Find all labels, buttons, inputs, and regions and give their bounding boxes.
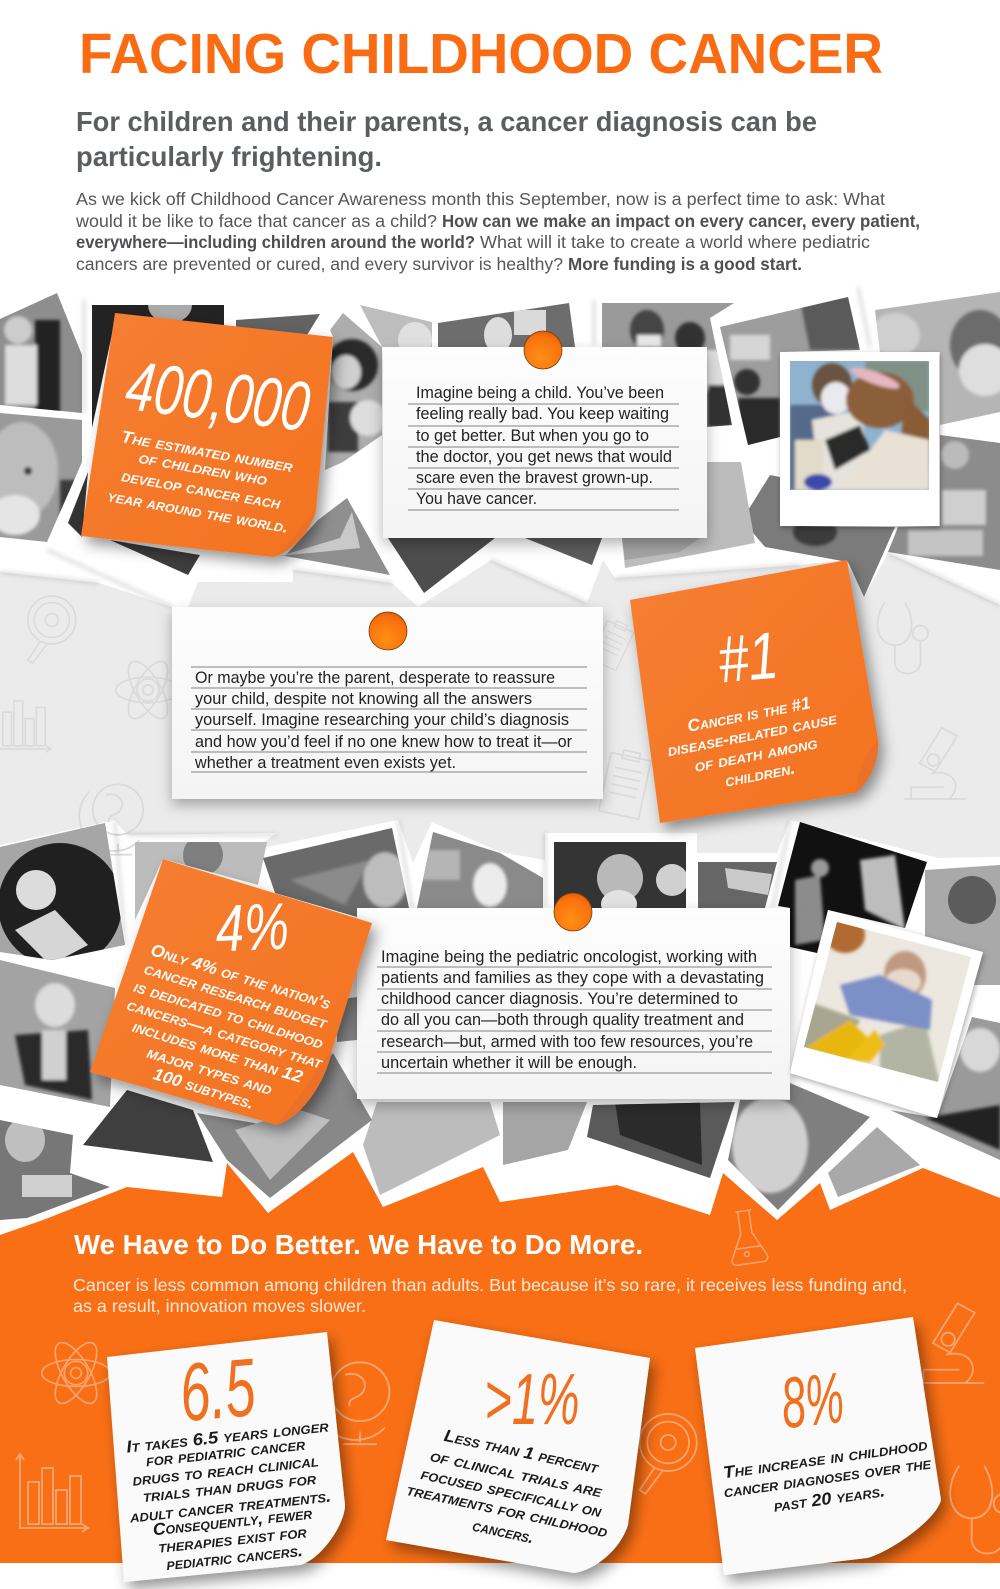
heading: we have to do better: We Have to Do Better. We Have to Do More. [74, 1229, 643, 1260]
photo: child with toys [363, 1102, 587, 1195]
photo: child in mask with poster [438, 303, 575, 347]
icon: pin [369, 612, 407, 650]
photo: beach [622, 462, 755, 568]
note: #1: #1 [715, 618, 781, 697]
photo: child with yellow toy in colour [790, 910, 983, 1118]
photo: lab researchers in colour [780, 352, 939, 526]
note: #1 [630, 560, 878, 823]
note: 8 percent: 8% [777, 1358, 848, 1444]
photo: child with knit hat [554, 842, 686, 908]
panel: or maybe you're the parent: Or maybe you’re the parent, desperate to reassure [195, 668, 555, 687]
panel: imagine being a child: to get better. But when you go to [416, 426, 649, 445]
note: 400,000: develop cancer each [120, 466, 282, 513]
note: 8 percent: The increase in childhood [722, 1435, 929, 1482]
intro text block: More funding is a good start. [568, 254, 802, 274]
photo: laptop [388, 538, 602, 593]
panel: pediatric oncologist [357, 893, 790, 1099]
note: less than 1 percent: >1% [484, 1360, 580, 1440]
note: 6.5 years: drugs to reach clinical [131, 1451, 319, 1490]
photo collage: lower band [0, 822, 1000, 1220]
panel: pediatric oncologist: uncertain whether it will be enough. [381, 1053, 637, 1072]
text block: orange section intro: Cancer is less common among children than adults. But because it’s so rare, it receives less funding and, [73, 1275, 907, 1295]
subheading: particularly frightening. [76, 141, 382, 172]
photo: boy in cap [890, 1017, 1000, 1160]
intro text block: cancers are prevented or cured, and every survivor is healthy? [76, 254, 563, 274]
panel: pediatric oncologist: Imagine being the pediatric oncologist, working with [381, 947, 757, 966]
note: less than 1 percent: of clinical trials are [429, 1446, 605, 1501]
note: #1: disease-related cause [666, 709, 839, 760]
panel: imagine being a child: Imagine being a child. You’ve been [416, 383, 664, 402]
note: 4% [90, 859, 372, 1125]
photo: boy at door [135, 835, 267, 920]
icon: pin [524, 331, 562, 369]
photo: sleeping girl [925, 865, 1000, 985]
note: 8 percent: past 20 years. [772, 1481, 886, 1516]
photo: bald child top [360, 305, 432, 347]
photo: plastic bag [197, 1053, 372, 1198]
photo: sleeping baby and sibling [870, 292, 1000, 425]
note: less than 1 percent [386, 1320, 650, 1573]
intro text block: How can we make an impact on every cancer, every patient, [442, 211, 920, 231]
note: 4%: 100 subtypes. [151, 1064, 256, 1113]
note: 400,000: year around the world. [106, 486, 290, 537]
note: 6.5 years: pediatric cancers. [165, 1541, 304, 1574]
background icons: orange section [16, 1209, 1000, 1553]
note: 400,000: 400,000 [122, 346, 314, 446]
photo: dolphin sign [698, 862, 777, 908]
photo collage: top band [0, 287, 1000, 597]
photo: boy on slide [0, 823, 125, 967]
note: 6.5 years: for pediatric cancer [145, 1435, 306, 1470]
note: 6.5 years: It takes 6.5 years longer [125, 1416, 330, 1457]
photo: upside-down child [0, 1118, 110, 1220]
photo: boy in jacket [0, 960, 115, 1107]
photo: child by trees [417, 832, 543, 908]
photo: two masked children [602, 303, 734, 427]
panel: imagine being a child: the doctor, you get news that would [416, 447, 672, 466]
panel: or maybe you're the parent: your child, despite not knowing all the answers [195, 689, 532, 708]
subheading [76, 106, 817, 172]
note: #1: of death among [693, 733, 819, 776]
note: 6.5 years [107, 1332, 345, 1582]
note: less than 1 percent: treatments for childhood [405, 1480, 610, 1541]
panel: or maybe you're the parent [172, 607, 603, 799]
photo: dark portrait behind note [92, 305, 224, 428]
photo: child with treatment sign [888, 435, 1000, 570]
note: 6.5 years: adult cancer treatments. [128, 1487, 332, 1527]
note: less than 1 percent: cancers. [471, 1516, 535, 1547]
note: #1: Cancer is the #1 [686, 693, 812, 736]
panel: imagine being a child [383, 331, 707, 538]
intro text block: What will it take to create a world where pediatric [480, 232, 870, 252]
note: 4%: 4% [214, 889, 290, 965]
note: #1: children. [723, 759, 797, 791]
panel: or maybe you're the parent: yourself. Imagine researching your child’s diagnosis [195, 710, 569, 729]
photo: child in stroller [0, 293, 82, 415]
text block: orange section intro [73, 1275, 907, 1316]
intro text block: would it be like to face that cancer as a child? [75, 211, 437, 231]
note: less than 1 percent: Less than 1 percent [442, 1426, 602, 1478]
note: 400,000: of children who [137, 448, 269, 489]
photo: dark fragments [68, 314, 320, 575]
panel: imagine being a child: feeling really bad. You keep waiting [416, 404, 669, 423]
orange lower section [0, 1152, 1000, 1563]
photo: girl with teddy [325, 313, 386, 470]
panel: pediatric oncologist: childhood cancer diagnosis. You’re determined to [381, 989, 738, 1008]
panel: pediatric oncologist: research—but, armed with too few resources, you’re [381, 1032, 753, 1051]
panel: pediatric oncologist: patients and families as they cope with a devastating [381, 968, 764, 987]
text block: orange section intro: as a result, innovation moves slower. [73, 1296, 366, 1316]
title: FACING CHILDHOOD CANCER [79, 22, 883, 86]
note: 8 percent: cancer diagnoses over the [722, 1453, 933, 1502]
note: 400,000: The estimated number [120, 427, 295, 476]
note: 400,000 [81, 313, 333, 557]
panel: pediatric oncologist: do all you can—both through quality treatment and [381, 1010, 744, 1029]
gray background band [0, 553, 1000, 863]
note: 6.5 years: 6.5 [176, 1342, 259, 1439]
photo: jacket close-up [587, 1102, 735, 1178]
note: 4%: cancer research budget [142, 959, 331, 1033]
icon: pin [554, 893, 592, 931]
background icons: gray band [0, 596, 966, 855]
subheading: For children and their parents, a cancer diagnosis can be [76, 106, 817, 137]
photo: bald baby [0, 413, 82, 542]
photo: small fragment [337, 997, 357, 1042]
note: 4%: major types and [145, 1043, 275, 1099]
note: 6.5 years: trials than drugs for [142, 1469, 317, 1506]
note: 4%: includes more than 12 [130, 1017, 306, 1087]
photo: girl with hair [263, 828, 409, 917]
intro text block: everywhere—including children around the world? [76, 232, 475, 252]
note: 8 percent [695, 1317, 941, 1575]
note: less than 1 percent: focused specifically on [419, 1464, 603, 1521]
panel: imagine being a child: scare even the bravest grown-up. [416, 468, 653, 487]
note: 4%: is dedicated to childhood [132, 977, 326, 1053]
photo: child lying down [742, 475, 895, 597]
note: 4%: Only 4% of the nation’s [148, 940, 333, 1013]
note: 6.5 years: Consequently, fewer [152, 1504, 313, 1539]
intro text block [75, 189, 920, 274]
intro text block: As we kick off Childhood Cancer Awareness month this September, now is a perfect time to ask: What [76, 189, 885, 209]
photo: under note [280, 498, 390, 575]
photo: curly-haired child [728, 1083, 870, 1210]
photo: gray corner [828, 1127, 920, 1197]
note: 4%: cancers—a category that [125, 995, 326, 1073]
photo: drums [83, 1090, 213, 1162]
photo: boy by water [720, 295, 860, 448]
panel: or maybe you're the parent: and how you’d feel if no one knew how to treat it—or [195, 732, 572, 751]
panel: or maybe you're the parent: whether a treatment even exists yet. [194, 753, 456, 772]
note: 6.5 years: therapies exist for [157, 1522, 308, 1557]
panel: imagine being a child: You have cancer. [416, 489, 537, 508]
photo: dancers [778, 822, 927, 953]
